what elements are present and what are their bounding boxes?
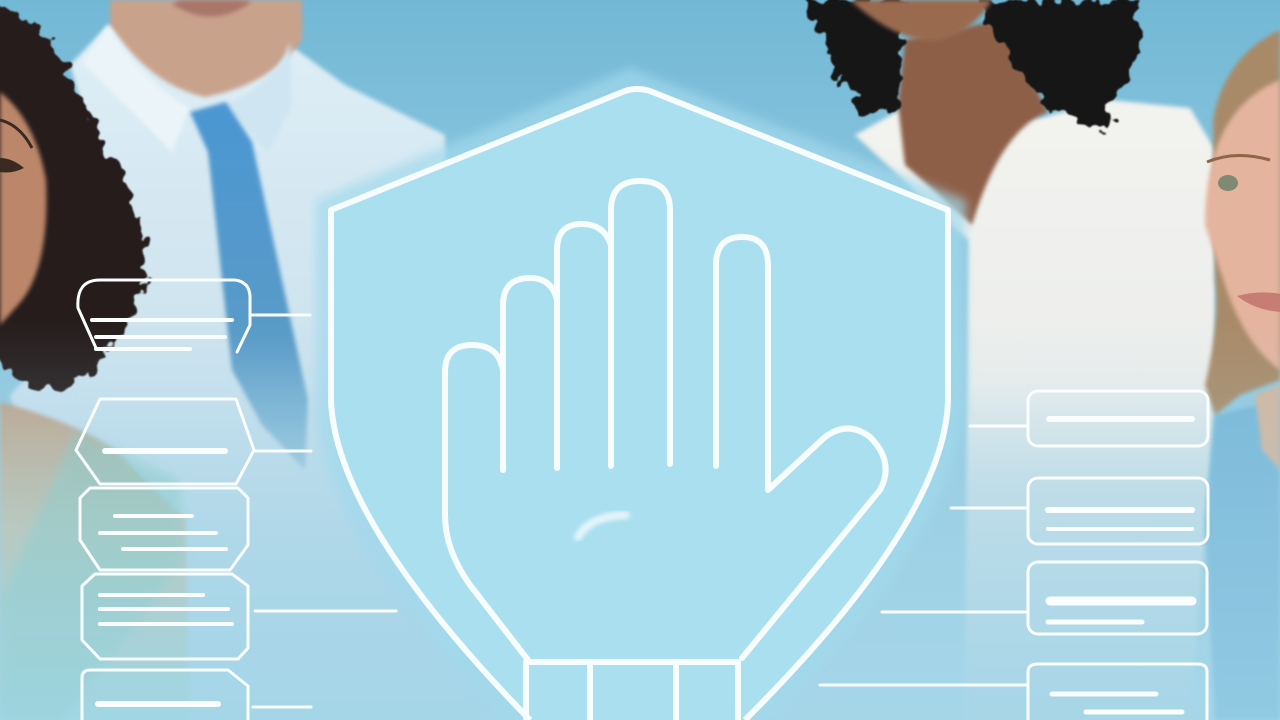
left callout 2 xyxy=(76,399,311,484)
person: man with blue tie xyxy=(10,0,470,720)
left callout 1 xyxy=(78,280,310,352)
lower haze xyxy=(0,320,1280,720)
left callout 5 xyxy=(82,670,311,720)
left callout 3 xyxy=(80,488,248,570)
right callout 4 xyxy=(820,664,1207,720)
person: left woman with curly hair xyxy=(0,0,190,720)
person: far right woman with blond hair xyxy=(1205,30,1280,720)
tie xyxy=(190,102,308,470)
shield icon xyxy=(331,89,948,720)
wrist cuff xyxy=(526,662,738,720)
right callout 2 xyxy=(951,478,1208,544)
right callout 3 xyxy=(882,562,1207,634)
right callout 1 xyxy=(970,391,1208,446)
palm highlight xyxy=(578,515,626,537)
left callout 4 xyxy=(82,574,396,659)
shield glow xyxy=(316,68,966,720)
hand icon xyxy=(445,181,886,720)
person: right woman with dark curly hair xyxy=(806,0,1215,720)
